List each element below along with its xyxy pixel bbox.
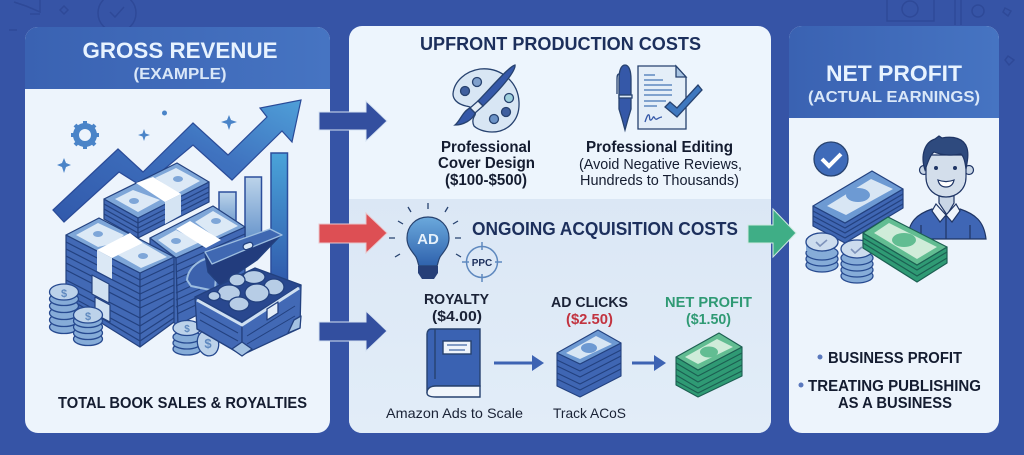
icon: AD lightbulb — [389, 203, 461, 279]
label: net profit — [665, 295, 752, 328]
subheading: actual earnings: (ACTUAL EARNINGS) — [808, 89, 980, 106]
icon: palette and brush — [453, 65, 519, 132]
arrow: to ongoing costs — [319, 213, 387, 253]
panel: net profit — [789, 26, 999, 433]
arrow: to net profit — [748, 209, 796, 257]
cash stack: middle — [150, 206, 245, 325]
text: cover design: Cover Design — [438, 155, 535, 172]
label: royalty — [424, 292, 489, 325]
icon: blue cash stack — [557, 330, 621, 397]
text: professional editing: Hundreds to Thousands) — [580, 172, 739, 189]
icon: gear — [71, 121, 99, 149]
icon: AD lightbulb: AD — [417, 231, 439, 248]
coin stack: small with standing coin: $ — [204, 336, 212, 351]
coin stack: short — [74, 307, 102, 346]
net profit header — [789, 26, 999, 118]
label: ad clicks: AD CLICKS — [551, 295, 628, 311]
icon: PPC target: PPC — [472, 258, 492, 269]
arrow: book to ad clicks — [494, 355, 544, 371]
label: net profit: ($1.50) — [686, 312, 731, 328]
icon: pen and document — [617, 65, 702, 130]
arrow: to royalty breakdown — [319, 311, 387, 351]
label: ad clicks: ($2.50) — [566, 312, 613, 328]
caption: track acos: Track ACoS — [553, 405, 626, 421]
arrow: to upfront costs — [319, 101, 387, 141]
heading: gross revenue: GROSS REVENUE — [82, 38, 278, 63]
icon: sparkles — [57, 110, 237, 173]
heading: net profit: NET PROFIT — [826, 61, 963, 86]
coin stack: tall — [50, 284, 78, 334]
caption: total book sales: TOTAL BOOK SALES & ROYALTIES — [58, 395, 307, 412]
bullet list: TREATING PUBLISHING — [808, 378, 981, 395]
coin stack: short: $ — [85, 311, 91, 323]
icon: coin stacks with checks — [806, 233, 873, 283]
icon: blue cash stack — [813, 171, 903, 243]
cash stack: back — [104, 163, 209, 238]
icon: check badge — [814, 142, 848, 176]
cash stack: front large — [66, 218, 174, 347]
treasure chest — [187, 229, 301, 356]
icon: green cash stack — [863, 217, 947, 282]
text: professional editing: (Avoid Negative Reviews, — [579, 156, 742, 173]
caption: amazon ads: Amazon Ads to Scale — [386, 405, 523, 421]
subheading: example: (EXAMPLE) — [134, 66, 226, 83]
icon: book — [427, 329, 480, 397]
heading: upfront production costs: UPFRONT PRODUCTION COSTS — [420, 34, 701, 54]
icon: PPC target — [462, 242, 502, 282]
text: professional editing: Professional Editing — [586, 139, 733, 156]
panel: costs — [349, 26, 771, 433]
text: cover design — [438, 139, 535, 189]
coin stack: small with standing coin — [173, 320, 222, 358]
bullet list: BUSINESS PROFIT — [828, 350, 962, 367]
label: royalty: ROYALTY — [424, 292, 489, 308]
label: ad clicks — [551, 295, 628, 328]
text: professional editing — [579, 139, 742, 189]
heading: ongoing acquisition costs: ONGOING ACQUISITION COSTS — [472, 219, 738, 239]
bullet list — [798, 350, 981, 412]
icon: person — [908, 136, 986, 239]
coin stack: small with standing coin: $ — [184, 324, 190, 335]
icon: green cash stack — [676, 333, 742, 397]
gross revenue header — [25, 27, 330, 89]
label: royalty: ($4.00) — [432, 309, 482, 325]
text: cover design: ($100-$500) — [445, 172, 527, 189]
coin stack: tall: $ — [61, 288, 67, 300]
label: net profit: NET PROFIT — [665, 295, 752, 311]
bar chart — [219, 153, 288, 288]
panel: gross revenue — [25, 27, 330, 433]
bullet list: AS A BUSINESS — [838, 395, 952, 412]
growth arrow — [53, 100, 301, 222]
faint background icons — [9, 0, 1014, 65]
arrow: ad clicks to net profit — [632, 355, 666, 371]
section: ongoing acquisition background — [349, 199, 771, 433]
text: cover design: Professional — [441, 139, 531, 156]
